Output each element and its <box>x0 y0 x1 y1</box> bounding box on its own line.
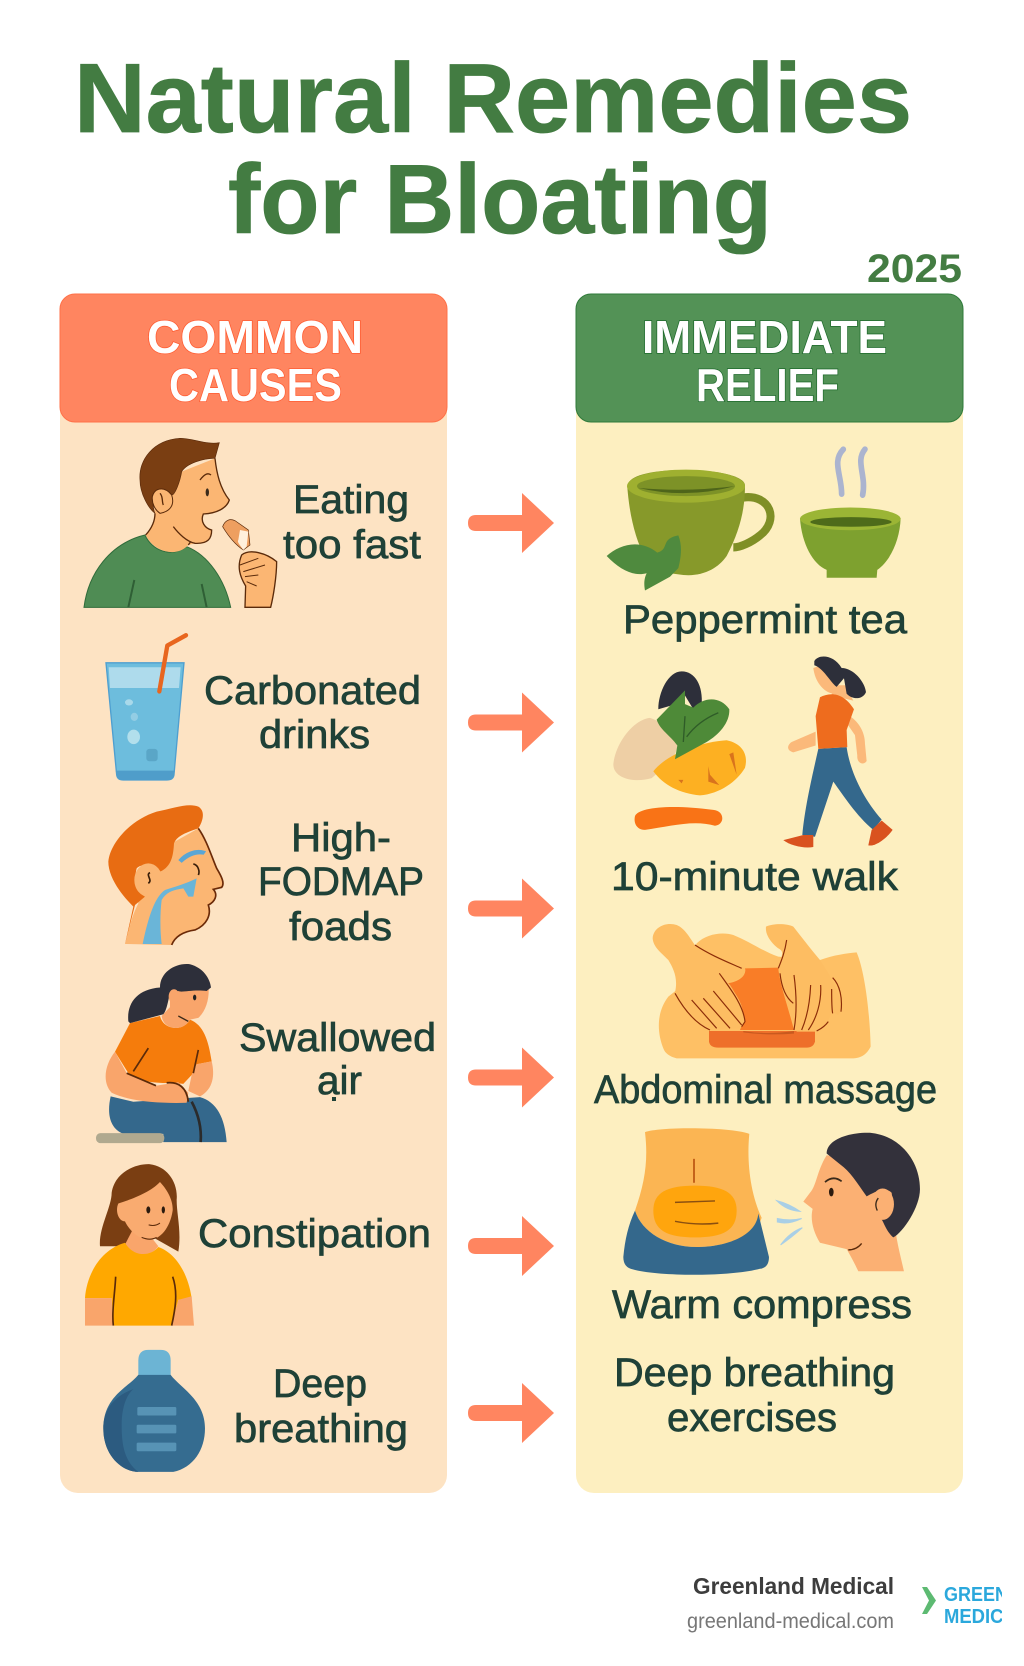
label: warm compress: Warm compress <box>612 1283 912 1327</box>
icon: woman in yellow shirt <box>85 1164 194 1326</box>
title: for Bloating <box>228 144 772 254</box>
label: eating too fast: Eating <box>293 478 409 522</box>
label: swallowed air: air <box>317 1059 362 1103</box>
arrow: row 2 <box>468 692 554 752</box>
label: deep breathing: breathing <box>234 1407 408 1451</box>
icon: peppermint tea cups <box>607 449 901 590</box>
label: carbonated drinks: drinks <box>259 713 370 757</box>
label: carbonated drinks: Carbonated <box>204 669 421 713</box>
icon: blue breathing flask <box>103 1350 205 1472</box>
label: abdominal massage: Abdominal massage <box>594 1068 937 1112</box>
label: constipation: Constipation <box>198 1212 431 1256</box>
causes panel background <box>60 300 447 1493</box>
arrow: row 5 <box>468 1216 554 1276</box>
relief header: IMMEDIATE <box>642 311 887 363</box>
label: carbonated drinks <box>204 669 421 757</box>
label: deep breathing exercises: Deep breathing <box>614 1351 895 1395</box>
relief header: RELIEF <box>696 359 839 411</box>
title: Natural Remedies <box>74 43 912 153</box>
title <box>74 43 912 254</box>
label: eating too fast: too fast <box>283 523 421 567</box>
label: high-FODMAP foods: High- <box>291 816 391 860</box>
icon: abdominal massage hands <box>653 924 871 1058</box>
arrow: row 4 <box>468 1048 554 1108</box>
label: deep breathing exercises: exercises <box>667 1396 837 1440</box>
footer: logo <box>922 1587 1002 1623</box>
label: peppermint tea: Peppermint tea <box>623 598 908 642</box>
label: high-FODMAP foods: foads <box>289 905 392 949</box>
causes header: COMMON <box>147 311 363 363</box>
label: swallowed air <box>239 1016 436 1103</box>
footer: publisher <box>687 1573 894 1633</box>
label: eating too fast <box>283 478 421 567</box>
footer: publisher: greenland-medical.com <box>687 1610 894 1633</box>
label: 10-minute walk: 10-minute walk <box>611 855 899 899</box>
relief panel background <box>576 300 963 1493</box>
label: swallowed air: Swallowed <box>239 1016 436 1060</box>
icon: man breathing out <box>777 1133 920 1271</box>
label: deep breathing: Deep <box>273 1362 367 1406</box>
icon: carbonated drink glass <box>106 635 186 780</box>
year label: 2025 <box>867 247 962 291</box>
icon: walking woman <box>783 657 893 848</box>
label: high-FODMAP foods: FODMAP <box>258 860 424 904</box>
arrow: row 3 <box>468 878 554 938</box>
arrow: row 1 <box>468 493 554 553</box>
icon: head profile <box>108 805 223 945</box>
causes header <box>60 294 447 422</box>
footer: publisher: Greenland Medical <box>693 1573 894 1599</box>
icon: man eating <box>84 438 277 607</box>
causes header: CAUSES <box>169 359 342 411</box>
icon: ginger, garlic and greens <box>613 671 746 830</box>
icon: seated woman <box>96 964 227 1143</box>
label: deep breathing <box>234 1362 408 1451</box>
label: high-FODMAP foods <box>258 816 424 949</box>
panel: common causes <box>60 294 447 1493</box>
footer: logo: GREEN <box>944 1584 1008 1606</box>
panel: immediate relief <box>576 294 963 1493</box>
arrow: row 6 <box>468 1383 554 1443</box>
relief header <box>576 294 963 422</box>
icon: warm compress on belly <box>623 1128 769 1275</box>
label: deep breathing exercises <box>614 1351 895 1440</box>
